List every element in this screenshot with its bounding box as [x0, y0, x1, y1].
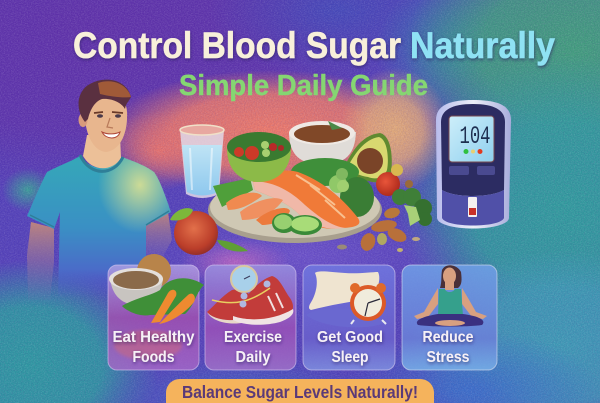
greens on plate: [213, 158, 374, 217]
illustration: lentil bowl: [289, 121, 356, 165]
card label: Stress: [426, 349, 470, 366]
card label: Reduce: [422, 329, 474, 346]
illustration: avocado: [343, 133, 392, 182]
card: reduce stress: [402, 265, 497, 370]
card: get good sleep: [303, 265, 395, 370]
card label: Daily: [236, 349, 271, 366]
salmon fillets: [226, 170, 359, 229]
icon: bowl of grains, cookie and carrots: [109, 254, 204, 324]
title: Naturally: [410, 25, 555, 66]
illustration: glucose meter: [436, 100, 511, 228]
icon: pillow, blanket and alarm clock: [306, 271, 386, 327]
illustration: apple with leaves: [170, 208, 248, 255]
card label: Get Good: [317, 329, 383, 346]
card label: Exercise: [224, 329, 282, 346]
illustration: smiling man in teal t-shirt: [27, 80, 172, 300]
card label: Sleep: [332, 349, 368, 366]
illustration: glass of water: [180, 125, 224, 198]
cucumber slices: [272, 213, 322, 235]
neck: [83, 135, 121, 168]
face details: [94, 112, 123, 113]
test strip: [468, 197, 477, 217]
card label: Eat Healthy: [112, 329, 195, 346]
illustration: salad bowl: [227, 132, 291, 182]
icon: woman meditating: [414, 265, 487, 326]
icon: red sneakers and stopwatch: [207, 266, 293, 325]
head: [85, 95, 127, 152]
title: Control Blood Sugar: [73, 25, 401, 66]
illustration: broccoli: [392, 188, 432, 226]
card: eat healthy foods: [108, 254, 204, 370]
card label: Foods: [132, 349, 174, 366]
card: exercise daily: [205, 265, 296, 370]
callout: balance sugar levels: Balance Sugar Levels Naturally!: [182, 382, 418, 402]
illustration: tomato and nuts: [337, 164, 420, 253]
illustration: plate with salmon and greens: [208, 158, 382, 243]
hair: [79, 80, 131, 122]
subtitle: Simple Daily Guide: [179, 70, 428, 102]
meter screen: 104: [460, 122, 490, 151]
